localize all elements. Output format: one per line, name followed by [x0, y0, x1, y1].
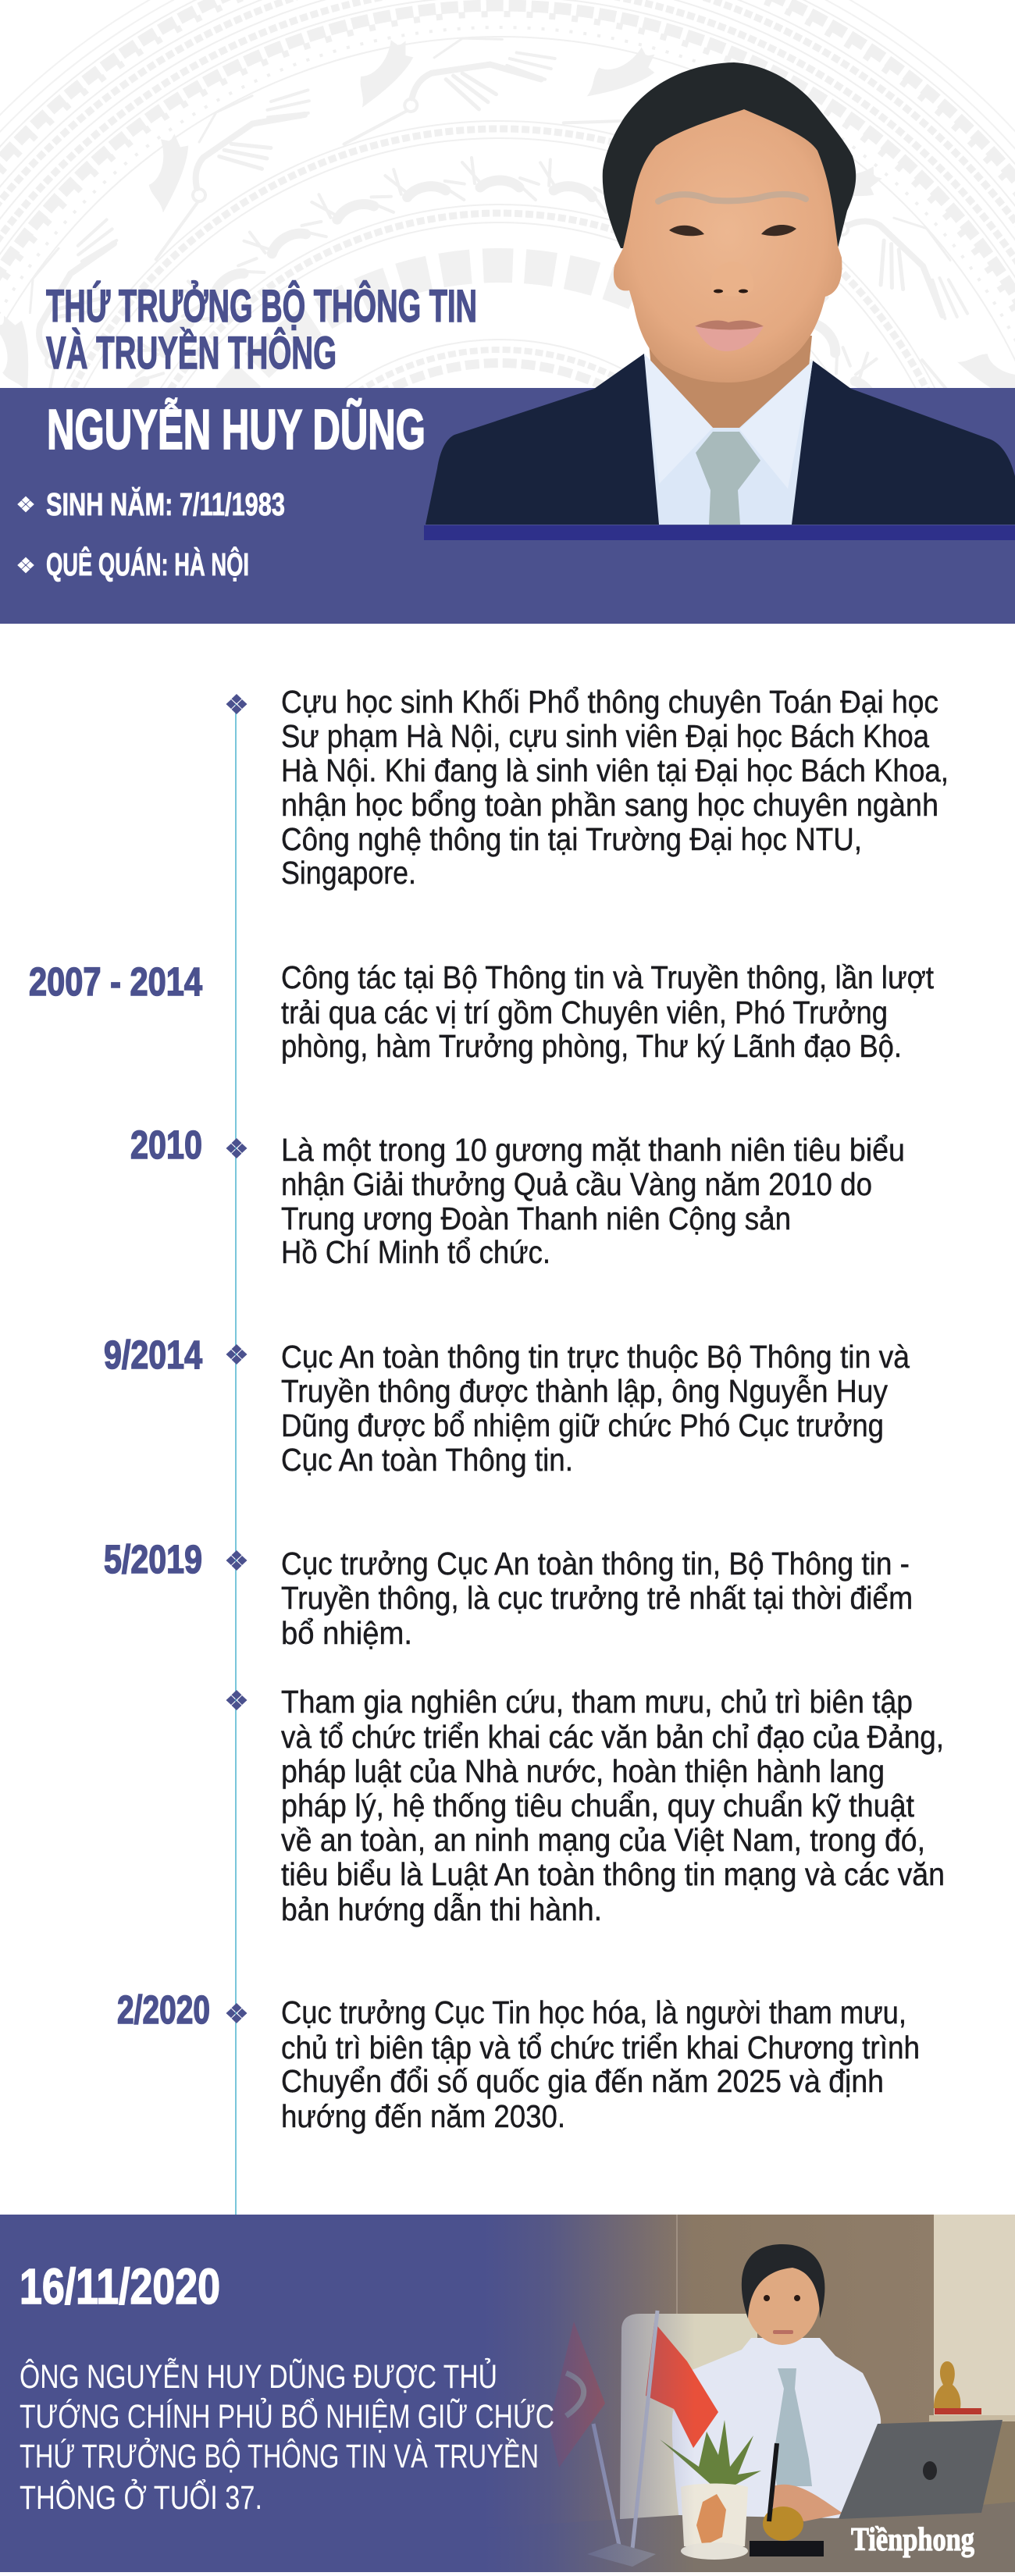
info: hometown — [17, 546, 249, 582]
portrait base strip — [424, 525, 1015, 540]
photo desk — [540, 2502, 1015, 2572]
entry: 9/2014: 9/2014 — [104, 1332, 203, 1377]
info: hometown: QUÊ QUÁN: HÀ NỘI — [46, 546, 249, 582]
entry: 2/2020: 2/2020 — [117, 1987, 210, 2032]
footer text: TƯỚNG CHÍNH PHỦ BỔ NHIỆM GIỮ CHỨC — [20, 2396, 554, 2435]
portrait photo — [426, 62, 1015, 525]
entry: 2007 - 2014: phòng, hàm Trưởng phòng, Thư ký Lãnh đạo Bộ. — [281, 1028, 902, 1064]
entry: 9/2014: Truyền thông được thành lập, ông Nguyễn Huy — [281, 1373, 888, 1409]
panel: footer band — [0, 2215, 1015, 2572]
photo stand — [587, 2543, 656, 2567]
entry: 9/2014: Dũng được bổ nhiệm giữ chức Phó Cục trưởng — [281, 1407, 884, 1443]
entry: 5/2019 — [104, 1537, 913, 1651]
entry: education: Công nghệ thông tin tại Trường Đại học NTU, — [281, 821, 862, 857]
photo shirt body — [672, 2338, 881, 2521]
entry: education: nhận học bổng toàn phần sang học chuyên ngành — [281, 787, 938, 823]
portrait eyes — [669, 225, 796, 236]
photo youth union flag — [549, 2322, 605, 2467]
footer text: ÔNG NGUYỄN HUY DŨNG ĐƯỢC THỦ — [20, 2357, 497, 2396]
entry: 9/2014 — [104, 1332, 910, 1478]
header title — [46, 281, 477, 379]
entry: 2010: nhận Giải thưởng Quả cầu Vàng năm 2010 do — [281, 1166, 872, 1202]
portrait face — [614, 109, 842, 382]
portrait suit jacket — [426, 354, 1015, 525]
portrait eyebrows — [658, 194, 806, 201]
photo bust — [934, 2361, 960, 2408]
photo wood wall — [531, 2215, 934, 2524]
timeline axis — [235, 704, 237, 2215]
entry: education — [226, 684, 949, 891]
photo flower pot — [681, 2484, 748, 2546]
photo necktie — [773, 2368, 812, 2486]
background: bronze drum pattern — [0, 0, 1015, 388]
entry: 2007 - 2014: trải qua các vị trí gồm Chuyên viên, Phó Trưởng — [281, 994, 888, 1030]
panel: header band — [0, 388, 1015, 624]
portrait shirt — [644, 354, 813, 525]
photo head — [748, 2268, 820, 2345]
photo Vietnamese flag — [646, 2322, 718, 2448]
photo plant — [660, 2420, 761, 2485]
footer fade overlay — [468, 2215, 703, 2572]
entry: legal work: Tham gia nghiên cứu, tham mưu, chủ trì biên tập — [281, 1684, 913, 1720]
footer office photo — [531, 2215, 1015, 2572]
info: birth date: SINH NĂM: 7/11/1983 — [46, 486, 285, 522]
footer date: 16/11/2020 — [20, 2258, 220, 2314]
entry: legal work: và tổ chức triển khai các văn bản chỉ đạo của Đảng, — [281, 1719, 944, 1755]
entry: education: Hà Nội. Khi đang là sinh viên tại Đại học Bách Khoa, — [281, 753, 949, 788]
header title: VÀ TRUYỀN THÔNG — [46, 328, 337, 379]
entry: 5/2019: 5/2019 — [104, 1537, 202, 1582]
entry: 2/2020: Chuyển đổi số quốc gia đến năm 2025 và định — [281, 2063, 884, 2099]
footer text: THÔNG Ở TUỔI 37. — [20, 2478, 262, 2517]
portrait hair — [603, 62, 856, 248]
portrait neck — [648, 336, 812, 431]
photo gold ornament — [763, 2507, 803, 2541]
name: NGUYỄN HUY DŨNG — [47, 398, 426, 461]
photo shelf — [934, 2421, 1015, 2505]
entry: legal work: về an toàn, an ninh mạng của Việt Nam, trong đó, — [281, 1822, 925, 1858]
entry: 2010 — [130, 1123, 905, 1270]
entry: 2010: Hồ Chí Minh tổ chức. — [281, 1234, 550, 1270]
portrait nose — [711, 262, 753, 297]
portrait tie — [696, 432, 760, 525]
entry: education: Cựu học sinh Khối Phổ thông chuyên Toán Đại học — [281, 684, 938, 720]
footer text — [20, 2357, 554, 2517]
entry: 2/2020: Cục trưởng Cục Tin học hóa, là người tham mưu, — [281, 1994, 906, 2030]
logo: Tiền phong: Tiềnphong — [851, 2522, 974, 2558]
entry: legal work — [226, 1684, 945, 1927]
entry: 5/2019: bổ nhiệm. — [281, 1615, 412, 1651]
entry: 2007 - 2014: 2007 - 2014 — [29, 959, 203, 1004]
info: birth date — [17, 486, 285, 522]
entry: 2010: Là một trong 10 gương mặt thanh niên tiêu biểu — [281, 1132, 905, 1168]
footer text: THỨ TRƯỞNG BỘ THÔNG TIN VÀ TRUYỀN — [20, 2437, 539, 2475]
entry: 2010: Trung ương Đoàn Thanh niên Cộng sản — [281, 1201, 791, 1236]
photo hands — [773, 2485, 843, 2521]
photo cream wall — [934, 2215, 1015, 2418]
entry: 2/2020: hướng đến năm 2030. — [281, 2098, 565, 2134]
entry: education: Sư phạm Hà Nội, cựu sinh viên Đại học Bách Khoa — [281, 718, 929, 754]
entry: 2010: 2010 — [130, 1123, 202, 1167]
entry: legal work: pháp lý, hệ thống tiêu chuẩn, quy chuẩn kỹ thuật — [281, 1788, 915, 1823]
header title: THỨ TRƯỞNG BỘ THÔNG TIN — [46, 281, 477, 332]
entry: 2/2020: chủ trì biên tập và tổ chức triển khai Chương trình — [281, 2030, 920, 2065]
portrait lips — [695, 321, 764, 351]
entry: 5/2019: Cục trưởng Cục An toàn thông tin, Bộ Thông tin - — [281, 1546, 910, 1582]
entry: 9/2014: Cục An toàn thông tin trực thuộc Bộ Thông tin và — [281, 1339, 910, 1375]
entry: 5/2019: Truyền thông, là cục trưởng trẻ nhất tại thời điểm — [281, 1580, 913, 1616]
photo chair — [620, 2314, 757, 2521]
entry: 2007 - 2014 — [29, 959, 935, 1064]
entry: 9/2014: Cục An toàn Thông tin. — [281, 1442, 573, 1478]
entry: legal work: bản hướng dẫn thi hành. — [281, 1891, 602, 1927]
entry: education: Singapore. — [281, 855, 416, 891]
entry: 2/2020 — [117, 1987, 920, 2134]
entry: 2007 - 2014: Công tác tại Bộ Thông tin và Truyền thông, lần lượt — [281, 959, 935, 995]
photo laptop — [839, 2420, 1003, 2519]
entry: legal work: pháp luật của Nhà nước, hoàn thiện hành lang — [281, 1753, 885, 1789]
entry: legal work: tiêu biểu là Luật An toàn thông tin mạng và các văn — [281, 1856, 945, 1892]
